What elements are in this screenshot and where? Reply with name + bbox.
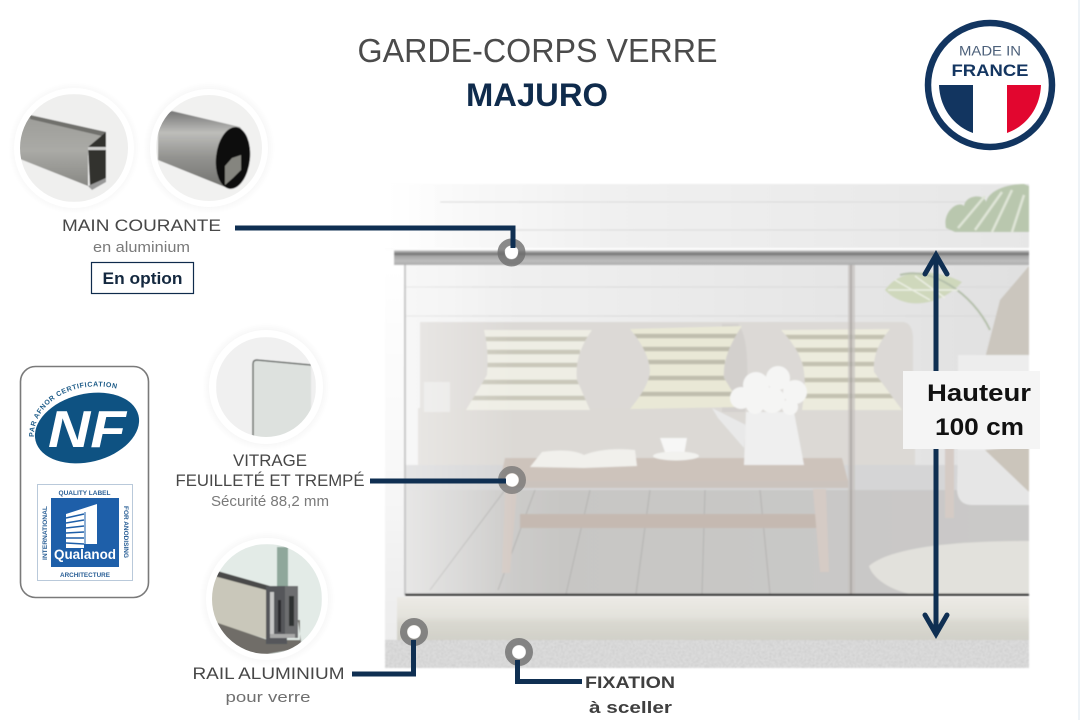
product: main courante profiles bbox=[20, 94, 262, 202]
label: rail aluminium: RAIL ALUMINIUM bbox=[192, 664, 344, 683]
badge: made in France: MADE IN bbox=[959, 42, 1021, 58]
label: vitrage: VITRAGE bbox=[233, 451, 307, 470]
cushion 2 bbox=[631, 326, 741, 409]
label: fixation: à sceller bbox=[589, 698, 672, 717]
label: vitrage bbox=[176, 451, 364, 510]
product: aluminium rail bbox=[212, 544, 322, 654]
illustration: glass railing scene bbox=[384, 184, 1029, 668]
rug bbox=[869, 541, 1029, 594]
sofa bbox=[420, 322, 913, 412]
cushion 1 bbox=[466, 330, 592, 410]
badge: made in France: FRANCE bbox=[952, 61, 1028, 80]
arrow: height dimension bbox=[925, 254, 947, 635]
panel: certifications bbox=[20, 366, 150, 598]
handrail bbox=[394, 248, 1029, 265]
logo: Qualanod bbox=[38, 484, 132, 580]
fade on scene top-left bbox=[384, 184, 444, 248]
cup bbox=[660, 438, 687, 455]
label: main courante: en aluminium bbox=[93, 239, 190, 256]
icon: round handrail profile bbox=[155, 94, 263, 202]
wicker chair bbox=[982, 266, 1029, 370]
label: hauteur 100 cm: Hauteur bbox=[927, 380, 1031, 407]
glass panel background bbox=[405, 265, 1029, 465]
callout: main courante bbox=[235, 228, 522, 263]
logo: Qualanod: Qualanod bbox=[54, 547, 116, 562]
logo: Qualanod: INTERNATIONAL bbox=[43, 506, 49, 560]
left glass fade bbox=[405, 265, 515, 595]
left edge beside glass bbox=[385, 250, 405, 640]
product: glass pane bbox=[216, 337, 316, 437]
callout: fixation bbox=[508, 642, 582, 682]
label: fixation: FIXATION bbox=[585, 673, 675, 692]
title: GARDE-CORPS VERRE bbox=[358, 32, 718, 69]
glass joint bbox=[848, 265, 855, 595]
title bbox=[358, 32, 718, 113]
page edge strip bbox=[1078, 0, 1080, 720]
wall above the handrail bbox=[385, 184, 1029, 250]
logo: Qualanod: QUALITY LABEL bbox=[58, 491, 111, 497]
label: main courante bbox=[62, 216, 221, 256]
tag: en option: En option bbox=[102, 269, 182, 288]
watering can with flowers bbox=[744, 412, 804, 465]
plant top right bbox=[945, 184, 1029, 232]
label: main courante: MAIN COURANTE bbox=[62, 216, 221, 235]
title: MAJURO bbox=[466, 77, 608, 113]
logo: Qualanod: ARCHITECTURE bbox=[60, 573, 110, 579]
logo: NF bbox=[29, 382, 140, 464]
label: fixation bbox=[585, 673, 675, 717]
label: rail aluminium bbox=[192, 664, 344, 706]
label: hauteur 100 cm bbox=[903, 371, 1040, 449]
plant middle right bbox=[885, 272, 962, 303]
white pot bbox=[958, 355, 1029, 455]
floor bbox=[405, 490, 1029, 595]
callout: vitrage bbox=[370, 470, 522, 490]
icon: square handrail profile bbox=[15, 94, 130, 202]
concrete bbox=[385, 640, 1029, 668]
under-sofa band bbox=[405, 465, 1029, 493]
logo: NF: NF bbox=[48, 401, 127, 459]
aluminium rail bbox=[397, 597, 1029, 640]
badge: made in France bbox=[928, 23, 1052, 147]
tag: en option bbox=[92, 262, 194, 294]
book bbox=[530, 449, 637, 468]
label: vitrage: Sécurité 88,2 mm bbox=[211, 494, 329, 510]
callout: rail aluminium bbox=[352, 622, 424, 674]
bottom rail seal bbox=[405, 594, 1029, 596]
label: hauteur 100 cm: 100 cm bbox=[935, 414, 1024, 441]
logo: NF: PAR AFNOR CERTIFICATION bbox=[29, 382, 117, 436]
label: rail aluminium: pour verre bbox=[226, 689, 310, 706]
coffee table bbox=[500, 458, 848, 481]
logo: Qualanod: FOR ANODISING bbox=[122, 506, 128, 558]
cushion 3 bbox=[782, 329, 902, 410]
label: vitrage: FEUILLETÉ ET TREMPÉ bbox=[176, 471, 364, 490]
